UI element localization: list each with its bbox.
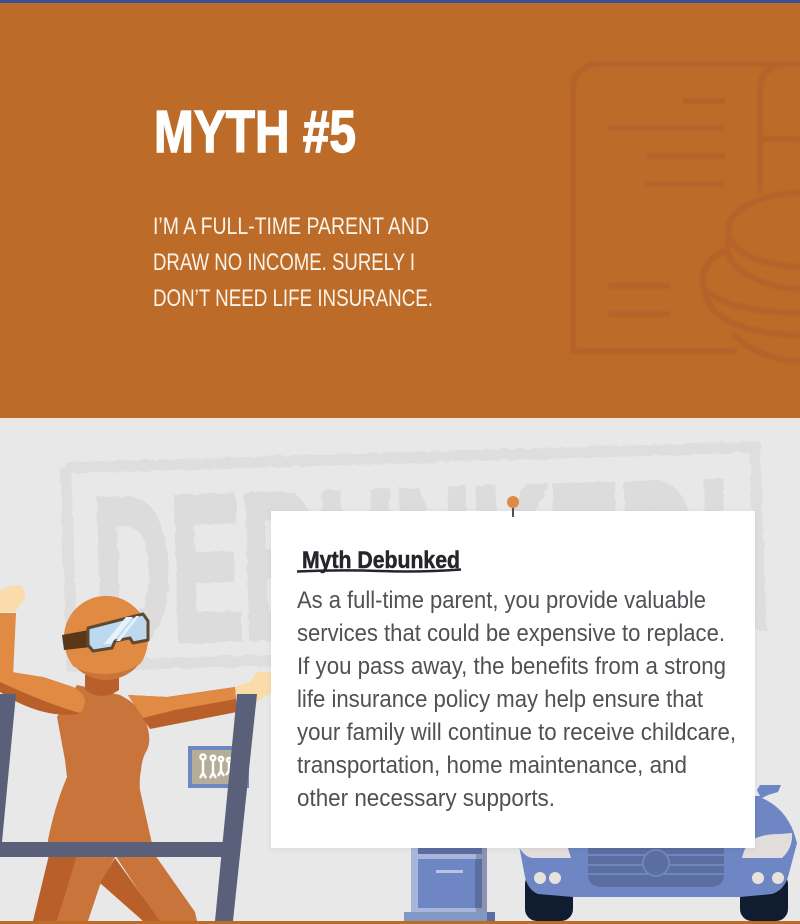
text block: myth statement — [153, 213, 433, 312]
icon: policy document and coins watermark — [573, 64, 800, 361]
heading: Myth Debunked: Myth Debunked — [302, 547, 460, 574]
wheels — [525, 872, 573, 921]
car body — [518, 785, 797, 897]
text block: explanation: If you pass away, the benefits from a strong — [297, 653, 726, 680]
bottom border — [0, 921, 800, 924]
ladder frame — [0, 694, 257, 921]
head — [64, 596, 148, 680]
tool cabinet — [404, 845, 495, 921]
car — [518, 785, 797, 921]
figure: person in goggles — [0, 585, 271, 921]
headlights — [518, 845, 571, 858]
text block: explanation: As a full-time parent, you provide valuable — [297, 587, 706, 614]
text block: myth statement: DRAW NO INCOME. SURELY I — [153, 249, 415, 276]
fog lights — [534, 872, 784, 884]
text block: explanation — [297, 587, 736, 812]
icon: pin — [507, 496, 519, 517]
text block: explanation: services that could be expensive to replace. — [297, 620, 725, 647]
text block: myth statement: I’M A FULL-TIME PARENT AND — [153, 213, 429, 240]
tool plaque on wall — [190, 748, 247, 786]
heading: Myth #5: MYTH #5 — [154, 99, 356, 165]
top panel: myth statement — [0, 0, 800, 418]
bottom panel: debunked illustration background — [0, 418, 800, 924]
text block: explanation: other necessary supports. — [297, 785, 555, 812]
neck — [85, 675, 119, 696]
text block: explanation: life insurance policy may help ensure that — [297, 686, 703, 713]
right arm — [128, 687, 237, 729]
text block: myth statement: DON’T NEED LIFE INSURANCE. — [153, 285, 433, 312]
card: myth debunked — [271, 496, 755, 848]
left arm — [0, 672, 85, 715]
brush underline — [297, 570, 461, 572]
goggles — [62, 630, 91, 650]
left leg — [33, 855, 78, 921]
hands — [0, 585, 25, 612]
text block: explanation: your family will continue to receive childcare, — [297, 719, 736, 746]
text block: explanation: transportation, home maintenance, and — [297, 752, 687, 779]
torso — [48, 685, 155, 857]
right leg — [100, 858, 162, 921]
grille — [588, 845, 724, 887]
